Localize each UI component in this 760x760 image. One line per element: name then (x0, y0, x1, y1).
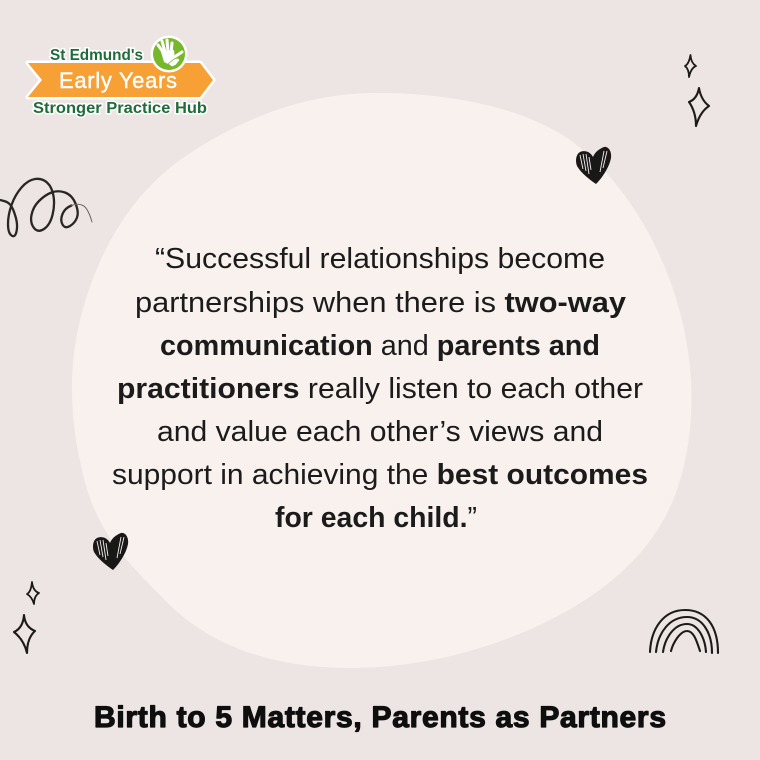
logo arrow outline (28, 63, 213, 97)
logo arrow (28, 63, 213, 97)
logo bottom text: Stronger Practice Hub (33, 100, 207, 117)
quote text: “Successful relationships become (155, 243, 605, 275)
title: source line: Birth to 5 Matters, Parents as Partners (94, 701, 666, 734)
logo top text: St Edmund's (50, 47, 143, 64)
logo: St Edmund's Early Years Stronger Practice Hub (28, 36, 213, 117)
quote text: and value each other’s views and (157, 416, 603, 448)
quote text: practitioners really listen to each other (117, 373, 644, 405)
icon: sparkle bottom large (14, 615, 35, 653)
quote text: support in achieving the best outcomes (112, 459, 648, 491)
icon: sparkle top large (689, 88, 709, 126)
icon: sparkle bottom small (27, 582, 39, 604)
icon: sparkle top small (685, 55, 696, 77)
icon: scribbled heart top (576, 147, 611, 184)
panel: organic blob (72, 93, 692, 668)
quote text: partnerships when there is two-way (135, 287, 626, 319)
icon: scribble spiral (0, 179, 92, 236)
logo badge: hands (150, 36, 188, 72)
icon: scribbled heart bottom (93, 533, 128, 570)
quote text: communication and parents and (160, 330, 600, 362)
quote text (112, 243, 648, 534)
logo main text: Early Years (59, 68, 177, 93)
icon: rainbow (650, 610, 718, 653)
quote text: for each child.” (275, 502, 477, 534)
